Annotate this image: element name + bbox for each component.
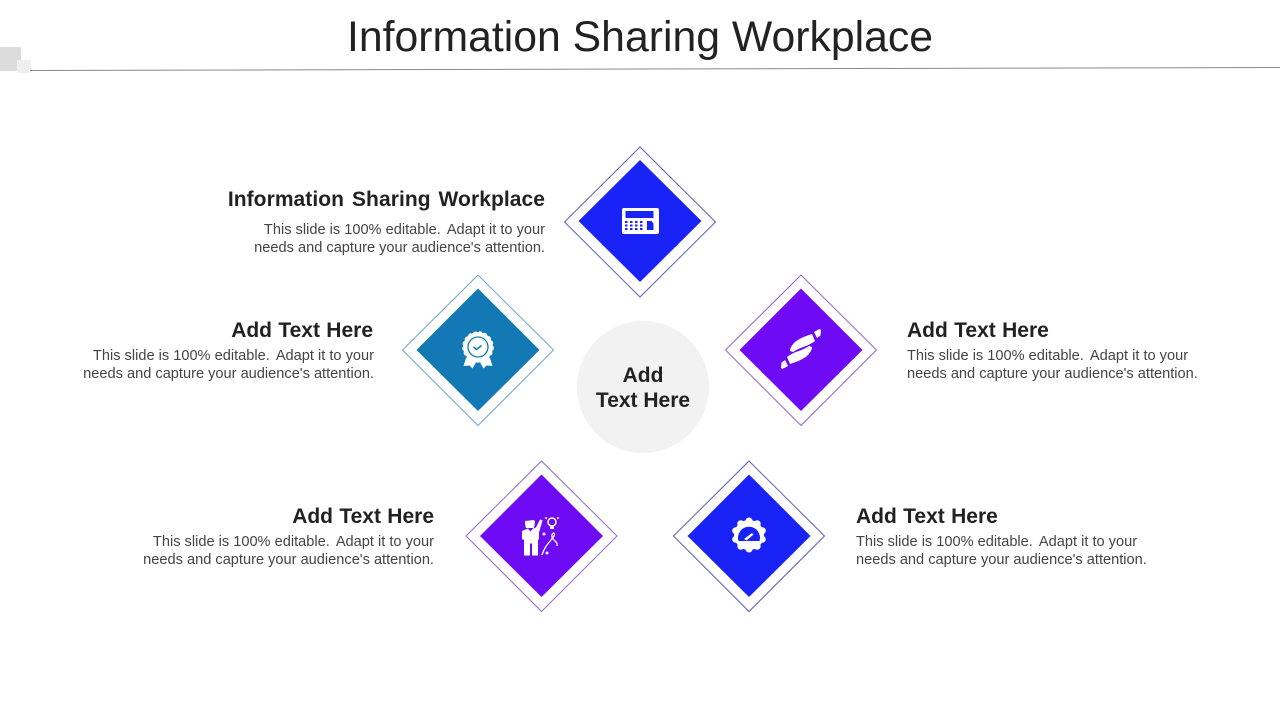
diamond: bottom left, engineer with idea icon	[466, 461, 617, 612]
body: bottom left	[143, 534, 434, 568]
center circle: Text Here	[596, 389, 690, 412]
text block: right	[907, 319, 1198, 382]
diamond: left, award icon	[402, 275, 554, 426]
body: right	[907, 348, 1198, 382]
body: bottom right	[856, 534, 1147, 568]
body: top: needs and capture your audience's attention.	[254, 240, 545, 256]
diamond: bottom right, gear gauge icon	[674, 461, 824, 612]
body: bottom left: needs and capture your audience's attention.	[143, 552, 434, 568]
heading: top: Information Sharing Workplace	[228, 188, 545, 211]
diamond: top, keypad icon	[564, 147, 716, 297]
heading: bottom left: Add Text Here	[292, 505, 434, 528]
text block: bottom right	[856, 505, 1147, 568]
center circle	[577, 321, 709, 453]
body: left: needs and capture your audience's attention.	[83, 366, 374, 382]
text block: bottom left	[143, 505, 434, 568]
body: bottom right: This slide is 100% editable. Adapt it to your	[856, 534, 1137, 550]
heading: bottom right: Add Text Here	[856, 505, 998, 528]
body: left: This slide is 100% editable. Adapt it to your	[93, 348, 374, 364]
body: right: This slide is 100% editable. Adapt it to your	[907, 348, 1188, 364]
heading: left: Add Text Here	[231, 319, 373, 342]
body: top	[254, 222, 545, 256]
body: top: This slide is 100% editable. Adapt it to your	[264, 222, 545, 238]
body: left	[83, 348, 374, 382]
body: bottom right: needs and capture your audience's attention.	[856, 552, 1147, 568]
title: Information Sharing Workplace	[347, 13, 933, 61]
header decoration	[0, 47, 1280, 73]
text block: left	[83, 319, 374, 382]
body: bottom left: This slide is 100% editable. Adapt it to your	[153, 534, 434, 550]
center circle: Add	[623, 364, 663, 387]
text block: top	[228, 188, 545, 256]
heading: right: Add Text Here	[907, 319, 1049, 342]
diamond: right, hands icon	[726, 275, 876, 426]
body: right: needs and capture your audience's attention.	[907, 366, 1198, 382]
